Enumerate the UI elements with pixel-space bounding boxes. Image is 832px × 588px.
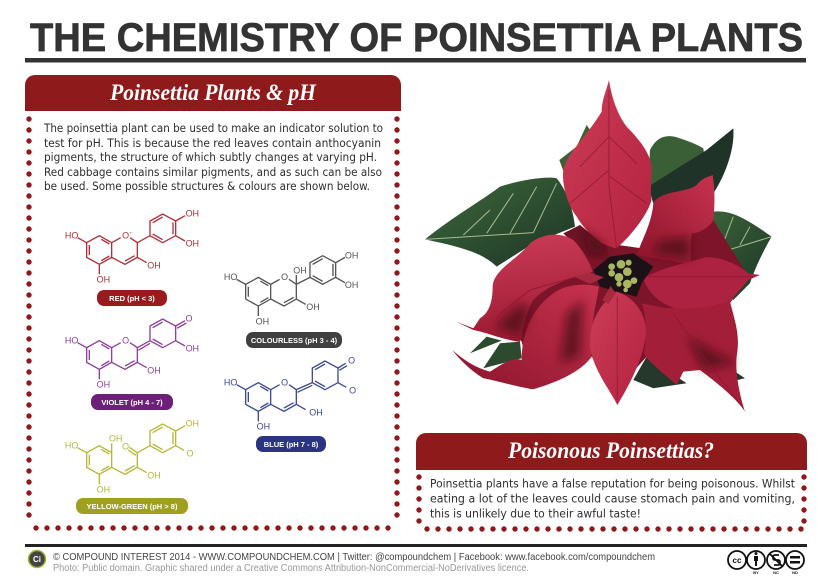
intro text block: pigments, the structure of which subtly changes at varying pH. <box>44 150 377 164</box>
panel heading <box>25 75 401 111</box>
structure: violet: HO <box>65 335 78 345</box>
structure: colourless: HO <box>224 272 237 282</box>
red bracts <box>452 80 760 412</box>
structure: yellow-green: O <box>186 448 193 458</box>
structure: colourless <box>224 250 358 326</box>
structure: yellow-green: O <box>122 441 129 451</box>
label: yellow-green <box>76 498 188 514</box>
poison text block: this is unlikely due to their awful taste! <box>430 506 641 520</box>
label: violet <box>91 394 173 410</box>
structure: violet: O <box>122 335 129 345</box>
intro text block: test for pH. This is because the red leaves contain anthocyanin <box>44 136 381 150</box>
structure: red: OH <box>186 209 199 219</box>
structure: blue: OH <box>257 422 270 432</box>
label: blue <box>256 436 326 452</box>
label: colourless <box>246 332 342 348</box>
structure: yellow-green: - <box>194 449 196 454</box>
structure: colourless: O <box>281 272 288 282</box>
structure: yellow-green: OH <box>97 485 110 495</box>
structure: red: OH <box>97 275 110 285</box>
structure: blue: OH <box>309 407 323 417</box>
panel heading <box>416 433 807 470</box>
structure: yellow-green: OH <box>109 434 122 444</box>
credit text: Photo: Public domain. Graphic shared under a Creative Commons Attribution-NonCommercial-NoDerivatives licence. <box>53 563 529 574</box>
poison text block <box>430 476 795 520</box>
structure: blue: O <box>348 356 355 366</box>
licence icons: cc <box>733 556 742 565</box>
logo: compound interest <box>28 550 46 568</box>
flower centre <box>574 253 653 304</box>
intro text block <box>43 121 383 193</box>
licence icons <box>728 551 804 575</box>
label: yellow-green: YELLOW-GREEN (pH > 8) <box>87 502 178 511</box>
structure: yellow-green: HO <box>65 440 78 450</box>
structure: yellow-green: OH <box>186 419 199 429</box>
intro text block: The poinsettia plant can be used to make an indicator solution to <box>43 121 383 135</box>
footer <box>28 550 804 575</box>
structure: blue <box>224 356 359 432</box>
label: red: RED (pH < 3) <box>109 294 155 303</box>
label: blue: BLUE (pH 7 - 8) <box>264 440 319 449</box>
panel heading: Poisonous Poinsettias? <box>507 438 714 463</box>
structure: blue: O <box>281 377 288 387</box>
panel heading: Poinsettia Plants & pH <box>109 80 317 105</box>
structure: blue: O <box>349 385 356 395</box>
label: violet: VIOLET (pH 4 - 7) <box>101 398 163 407</box>
structure: red: OH <box>186 238 199 248</box>
structure: colourless: OH <box>345 250 358 260</box>
licence icons: BY <box>753 570 759 575</box>
logo: compound interest: Ci <box>33 555 41 564</box>
structure: yellow-green <box>65 419 199 495</box>
credit text <box>53 551 655 574</box>
label: colourless: COLOURLESS (pH 3 - 4) <box>251 336 338 345</box>
structure: red <box>65 209 199 285</box>
panel: poinsettia plants and pH <box>25 75 401 528</box>
structure: colourless: OH <box>293 265 307 275</box>
licence icons: ND <box>792 570 798 575</box>
poison text block: eating a lot of the leaves could cause stomach pain and vomiting, <box>430 492 795 506</box>
structure: colourless: OH <box>306 302 320 312</box>
intro text block: Red cabbage contains similar pigments, and as such can be also <box>44 165 382 179</box>
structure: colourless: OH <box>256 316 269 326</box>
panel: poisonous poinsettias <box>416 433 807 529</box>
structure: violet: O <box>185 314 192 324</box>
intro text block: be used. Some possible structures & colours are shown below. <box>44 179 370 193</box>
poison text block: Poinsettia plants have a false reputation for being poisonous. Whilst <box>430 476 795 490</box>
credit text: © COMPOUND INTEREST 2014 - WWW.COMPOUNDCHEM.COM | Twitter: @compoundchem | Facebook: www.facebook.com/compoundchem <box>53 551 655 563</box>
structure: colourless: OH <box>345 280 358 290</box>
structure: violet: OH <box>147 365 161 375</box>
label: red <box>97 290 167 306</box>
structure: red: OH <box>147 260 161 270</box>
structure: red: + <box>129 231 132 236</box>
structure: violet <box>65 314 199 390</box>
structure: blue: - <box>357 386 359 391</box>
title: THE CHEMISTRY OF POINSETTIA PLANTS <box>30 16 803 60</box>
structure: blue: HO <box>224 377 237 387</box>
structure: violet: OH <box>97 380 110 390</box>
structure: red: HO <box>65 230 78 240</box>
structure: yellow-green: OH <box>147 470 161 480</box>
licence icons: NC <box>773 570 779 575</box>
poinsettia illustration <box>425 80 772 412</box>
green leaves <box>425 125 772 388</box>
structure: violet: OH <box>186 343 199 353</box>
structure: red: O <box>122 230 129 240</box>
